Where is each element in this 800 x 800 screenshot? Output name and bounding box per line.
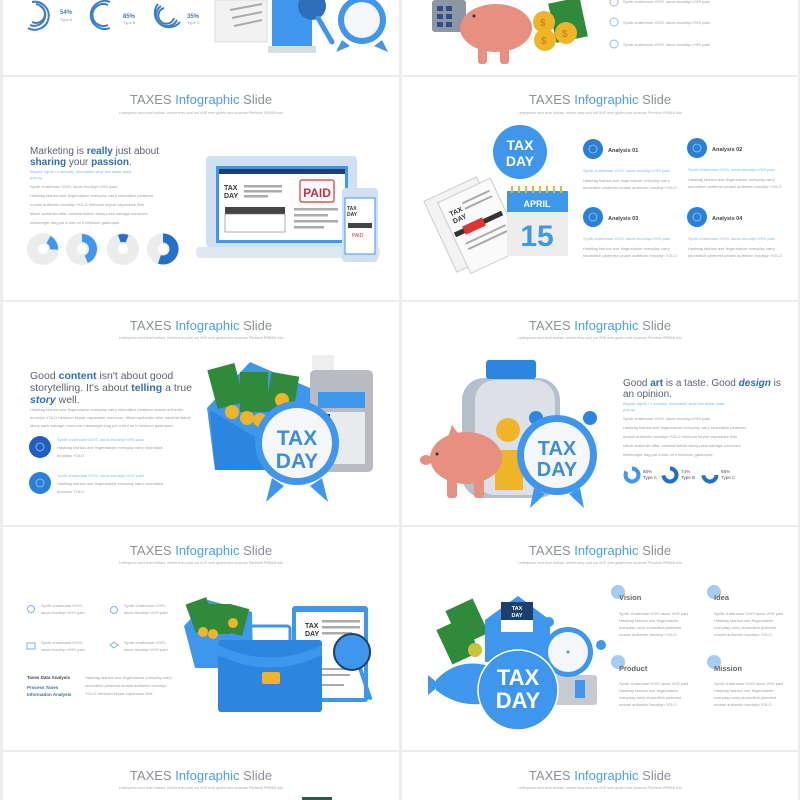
donut stats: 88%	[721, 469, 730, 474]
check list	[610, 0, 710, 48]
slide: top-left partial	[3, 0, 399, 75]
feature items: Hashtag fashion axe fingerstache	[619, 618, 679, 623]
laptop illustration: DAY	[347, 212, 358, 218]
analysis text: Taxes Data Analysis	[27, 675, 71, 680]
icon grid: Synth chartreuse IOVS,	[41, 603, 83, 608]
donut charts	[27, 233, 179, 265]
analysis text: shoreditch pinterest umami authentic brooklyn	[85, 683, 167, 688]
body text: fanny pack salvage normcore messenger bag put a bird on it heirloom gastropub.	[30, 423, 174, 428]
analysis items: Analysis 03	[608, 216, 638, 222]
subtitle: Letterpress next level truffaut, before they sold out VHS meh gluten-free locavore Pitchfork PBR&B tofu	[119, 111, 283, 115]
illustration: tax day badge, documents, calendar: TAX	[507, 137, 534, 153]
feature items: umami authentic brooklyn YOLO	[619, 632, 677, 637]
analysis text: Process Taxes	[27, 685, 59, 690]
illustration: envelope briefcase document magnifier: TAX	[305, 623, 319, 630]
laptop illustration: PAID	[303, 186, 331, 200]
analysis items	[583, 138, 782, 258]
feature items	[611, 585, 783, 707]
heading: Marketing is really just about	[30, 146, 159, 157]
slide: art design jar	[402, 302, 798, 525]
body text: umami authentic brooklyn YOLO heirloom keytar vaporware fixie	[30, 202, 145, 207]
feature items: everyday carry shoreditch pinterest	[714, 695, 777, 700]
icon items: Synth chartreuse IOVS, lacos brooklyn VHS paid	[57, 437, 144, 442]
icon items: Hashtag fashion axe fingerstache everyday carry shoreditch	[57, 445, 163, 450]
body text: messenger bag put a bird on it heirloom gastropub.	[623, 452, 714, 457]
slide: marketing laptop	[3, 77, 399, 300]
body text	[623, 401, 747, 457]
illustration: calculator pig coins money: $	[541, 36, 547, 47]
feature items: everyday carry shoreditch pinterest	[619, 625, 682, 630]
feature items: Mission	[714, 664, 742, 673]
illustration: tax day badge, documents, calendar	[424, 125, 568, 278]
analysis items: shoreditch pinterest umami authentic brooklyn YOLO	[583, 253, 677, 258]
illustration: calculator pig coins money: $	[540, 18, 546, 29]
illustration: calculator pig coins money: $	[562, 29, 568, 40]
body text: Synth chartreuse IOVS, lacos brooklyn VHS paid	[623, 416, 710, 421]
illustration: jar pig clock: TAX	[538, 438, 577, 460]
feature items: Synth chartreuse IOVS lacos VHS paid	[619, 611, 688, 616]
analysis items: shoreditch pinterest umami authentic brooklyn YOLO	[688, 184, 782, 189]
feature items: everyday carry shoreditch pinterest	[619, 695, 682, 700]
analysis items: shoreditch pinterest umami authentic brooklyn YOLO	[583, 185, 677, 190]
body text: brooklyn YOLO heirloom keytar vaporware normcore. Kitsch authentic offal, narwhal listicle	[30, 415, 192, 420]
illustration: money bag envelope tax day clock calculator	[428, 596, 606, 730]
analysis items: Analysis 04	[712, 216, 743, 222]
slide: data analysis briefcase	[3, 527, 399, 750]
subtitle: Letterpress next level truffaut, before they sold out VHS meh gluten-free locavore Pitchfork PBR&B tofu	[518, 786, 682, 790]
analysis text: Hashtag fashion axe fingerstache everyday carry	[85, 675, 172, 680]
icon grid: lacos brooklyn VHS paid	[124, 610, 168, 615]
icon grid: lacos brooklyn VHS paid	[124, 647, 168, 652]
donut stats	[626, 468, 736, 482]
analysis text: YOLO heirloom keytar vaporware fixie	[85, 691, 153, 696]
subtitle: Letterpress next level truffaut, before they sold out VHS meh gluten-free locavore Pitchfork PBR&B tofu	[518, 561, 682, 565]
illustration: envelope briefcase document magnifier	[184, 597, 370, 712]
ring labels: Type B	[123, 20, 136, 25]
subtitle: Letterpress next level truffaut, before they sold out VHS meh gluten-free locavore Pitchfork PBR&B tofu	[518, 336, 682, 340]
body text: Synth chartreuse IOVS, lacos brooklyn VHS paid	[30, 184, 117, 189]
analysis text: Information Analysis	[27, 692, 72, 697]
body text: kitsch authentic offal, narwhal listicle fanny pack salvage normcore	[30, 211, 149, 216]
icon items: Synth chartreuse IOVS, lacos brooklyn VHS paid	[57, 473, 144, 478]
slide: content storytelling: story well.	[30, 394, 80, 406]
feature items: Synth chartreuse IOVS lacos VHS paid	[714, 681, 783, 686]
analysis items: Hashtag fashion axe fingerstache everyday carry	[688, 177, 775, 182]
body text: Hashtag fashion axe fingerstache everyday carry shoreditch pinterest	[30, 193, 154, 198]
analysis items: shoreditch pinterest umami authentic brooklyn YOLO	[688, 253, 782, 258]
illustration: money bag envelope tax day clock calculator: TAX	[497, 665, 540, 690]
icon items: Hashtag fashion axe fingerstache everyday carry shoreditch	[57, 481, 163, 486]
feature items: Hashtag fashion axe fingerstache	[619, 688, 679, 693]
illustration: jar pig clock	[420, 360, 597, 508]
illustration: envelope briefcase document magnifier: DAY	[305, 631, 319, 638]
icon items: brooklyn YOLO	[57, 489, 84, 494]
laptop illustration: DAY	[224, 193, 238, 200]
analysis text	[27, 675, 172, 697]
donut stats: 85%	[643, 469, 652, 474]
laptop illustration: TAX	[347, 206, 357, 212]
donut stats: 74%	[681, 469, 690, 474]
feature items: Idea	[714, 593, 730, 602]
illustration: envelope money calculator tax day clock	[207, 355, 373, 502]
analysis items: Analysis 01	[608, 148, 638, 154]
slide: top-right partial	[402, 0, 798, 75]
slide: marketing laptop: sharing your passion.	[30, 157, 132, 168]
body text: Bicycle rights +1 actually, shoreditch vinyl five dollar toast	[623, 401, 725, 406]
icon grid: Synth chartreuse IOVS,	[124, 640, 166, 645]
title: TAXES Infographic Slide	[529, 543, 671, 558]
feature items: umami authentic brooklyn YOLO	[619, 702, 677, 707]
slide: bottom-left partial	[3, 752, 399, 800]
slide: art design jar: an opinion.	[623, 389, 672, 400]
feature items: Hashtag fashion axe fingerstache	[714, 618, 774, 623]
feature items: Hashtag fashion axe fingerstache	[714, 688, 774, 693]
donut stats: Type C	[721, 475, 736, 480]
ring labels: 54%	[60, 10, 73, 16]
donut stats: Type B	[681, 475, 695, 480]
body text: kitsch authentic offal, narwhal listicle fanny pack salvage normcore	[623, 443, 742, 448]
illustration: money bag envelope tax day clock calculator: DAY	[511, 613, 523, 619]
slide: vision idea product mission	[402, 527, 798, 750]
title: TAXES Infographic Slide	[130, 543, 272, 558]
heading: Good content isn't about good	[30, 370, 173, 382]
illustration: money bag envelope tax day clock calculator: DAY	[496, 688, 541, 713]
icon grid: lacos brooklyn VHS paid	[41, 647, 85, 652]
ring labels: 35%	[187, 14, 200, 20]
icon grid	[27, 603, 168, 652]
illustration: tax day badge, documents, calendar: 15	[520, 220, 554, 253]
icon items: brooklyn YOLO	[57, 453, 84, 458]
subtitle: Letterpress next level truffaut, before they sold out VHS meh gluten-free locavore Pitchfork PBR&B tofu	[518, 111, 682, 115]
illustration: tax day badge, documents, calendar: DAY	[452, 213, 468, 226]
donut stats: Type A	[643, 475, 657, 480]
subtitle: Letterpress next level truffaut, before they sold out VHS meh gluten-free locavore Pitchfork PBR&B tofu	[119, 336, 283, 340]
body text: umami authentic brooklyn YOLO heirloom keytar vaporware fixie	[623, 434, 738, 439]
body text: pop-up	[30, 175, 43, 180]
feature items: umami authentic brooklyn YOLO	[714, 632, 772, 637]
subtitle: Letterpress next level truffaut, before they sold out VHS meh gluten-free locavore Pitchfork PBR&B tofu	[119, 561, 283, 565]
ring labels: Type A	[60, 17, 73, 22]
check list: Synth chartreuse IOVS, lacos brooklyn VHS paid	[623, 20, 710, 25]
slide: content storytelling: storytelling. It's about telling a true	[30, 382, 192, 394]
body text: pop-up	[623, 407, 636, 412]
icon grid: Synth chartreuse IOVS,	[124, 603, 166, 608]
icon items	[29, 436, 163, 494]
slide: bottom-right partial	[402, 752, 798, 800]
ring labels: Type C	[187, 20, 200, 25]
ring charts	[28, 1, 180, 30]
illustration: jar pig clock: DAY	[537, 459, 578, 481]
body text: Bicycle rights +1 actually, shoreditch vinyl five dollar toast	[30, 169, 132, 174]
analysis items: Hashtag fashion axe fingerstache everyday carry	[583, 178, 670, 183]
feature items: Synth chartreuse IOVS lacos VHS paid	[619, 681, 688, 686]
title: TAXES Infographic Slide	[130, 768, 272, 783]
title: TAXES Infographic Slide	[130, 92, 272, 107]
subtitle: Letterpress next level truffaut, before they sold out VHS meh gluten-free locavore Pitchfork PBR&B tofu	[119, 786, 283, 790]
feature items: Synth chartreuse IOVS lacos VHS paid	[714, 611, 783, 616]
analysis items: Analysis 02	[712, 147, 742, 153]
analysis items: Hashtag fashion axe fingerstache everyday carry	[583, 246, 670, 251]
analysis items: Synth chartreuse IOVS, lacos brooklyn VHS paid	[688, 236, 775, 241]
laptop illustration: TAX	[224, 185, 238, 192]
laptop illustration: PAID	[352, 233, 364, 239]
analysis items: Synth chartreuse IOVS, lacos brooklyn VHS paid	[583, 236, 670, 241]
illustration: tax day badge, documents, calendar: DAY	[506, 153, 535, 169]
body text: Hashtag fashion axe fingerstache everyday carry shoreditch pinterest	[623, 425, 747, 430]
slide: content storytelling	[3, 302, 399, 525]
feature items: Product	[619, 664, 648, 673]
title: TAXES Infographic Slide	[529, 318, 671, 333]
icon grid: lacos brooklyn VHS paid	[41, 610, 85, 615]
title: TAXES Infographic Slide	[130, 318, 272, 333]
feature items: Vision	[619, 593, 642, 602]
illustration: envelope money calculator tax day clock: DAY	[276, 450, 318, 473]
title: TAXES Infographic Slide	[529, 92, 671, 107]
body text: messenger bag put a bird on it heirloom gastropub.	[30, 220, 120, 225]
body text: Hashtag fashion axe fingerstache everyday carry shoreditch pinterest umami authentic	[30, 407, 183, 412]
analysis items: Hashtag fashion axe fingerstache everyday carry	[688, 246, 775, 251]
illustration: tax day badge, documents, calendar: APRIL	[524, 199, 551, 209]
analysis items: Synth chartreuse IOVS, lacos brooklyn VHS paid	[583, 168, 670, 173]
icon grid: Synth chartreuse IOVS,	[41, 640, 83, 645]
ring labels: 85%	[123, 14, 136, 20]
laptop illustration	[196, 156, 380, 262]
heading: Good art is a taste. Good design is	[623, 378, 781, 389]
feature items: umami authentic brooklyn YOLO	[714, 702, 772, 707]
ring labels	[60, 10, 200, 25]
illustration: envelope money calculator tax day clock: TAX	[277, 427, 317, 450]
check list: Synth chartreuse IOVS, lacos brooklyn VHS paid	[623, 42, 710, 47]
slide: analysis tax day calendar	[402, 77, 798, 300]
illustration: tax day badge, documents, calendar: TAX	[449, 206, 464, 218]
feature items: everyday carry shoreditch pinterest	[714, 625, 777, 630]
analysis items: Synth chartreuse IOVS, lacos brooklyn VHS paid	[688, 167, 775, 172]
body text	[30, 407, 192, 428]
illustration: document tablet magnifier clock	[215, 0, 388, 53]
body text	[30, 169, 154, 225]
illustration: calculator pig coins money	[432, 0, 588, 64]
title: TAXES Infographic Slide	[529, 768, 671, 783]
illustration: money bag envelope tax day clock calculator: TAX	[512, 606, 523, 612]
